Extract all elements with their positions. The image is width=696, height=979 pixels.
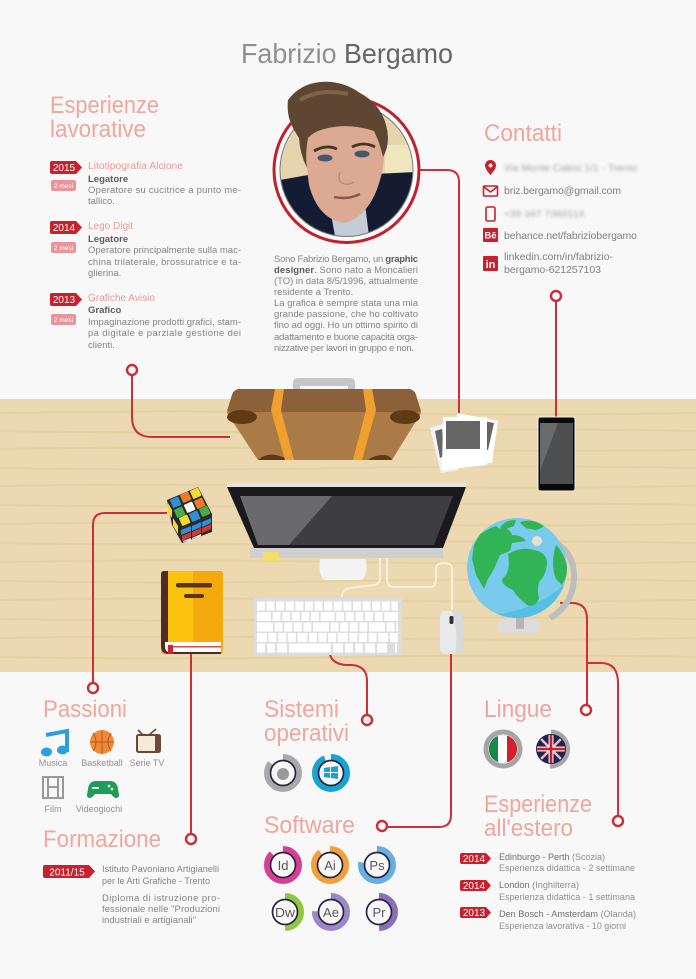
ring: indesign: Id: [278, 858, 288, 873]
icon: behance: Bē: [484, 230, 497, 242]
trip: london: London (Inghilterra): [499, 880, 579, 890]
bio text: La grafica è sempre stata una mia: [274, 298, 419, 309]
icon: windows ring: [315, 757, 347, 789]
ring: illustrator: Ai: [324, 858, 336, 873]
trip: den bosch: [460, 907, 636, 931]
job 2014: 2014: [53, 223, 76, 234]
bio text: [274, 254, 419, 354]
bio text: Sono Fabrizio Bergamo, un graphic: [274, 254, 418, 265]
job 2013: clienti.: [88, 340, 115, 351]
ring: dreamweaver: Dw: [275, 905, 296, 920]
behance text: behance.net/fabriziobergamo: [504, 230, 637, 242]
job 2015: [50, 161, 241, 207]
trip: london: Esperienza didattica - 1 settimana: [499, 892, 635, 902]
job 2013: Impaginazione prodotti grafici, stam-: [88, 317, 241, 328]
panel: contacts: [483, 120, 637, 276]
pin: passions: [88, 683, 98, 693]
bio text: residente a Trento.: [274, 287, 353, 298]
bio text: designer. Sono nato a Moncalieri: [274, 265, 418, 276]
icon: mouse: [440, 611, 463, 654]
label: videogiochi: Videogiochi: [76, 804, 122, 814]
pin: abroad: [613, 816, 623, 826]
phone (blurred): +39 347 7360114: [504, 209, 584, 220]
icon: location pin: [485, 160, 496, 175]
ring: after effects: Ae: [323, 905, 339, 920]
bio text: adattamento e buone capacità orga-: [274, 332, 418, 343]
job 2015: 2015: [53, 163, 76, 174]
flag: uk: [536, 732, 568, 766]
heading: lavorative: lavorative: [50, 116, 146, 143]
pin: education: [186, 834, 196, 844]
panel: languages: [484, 696, 568, 766]
icon: linkedin: [483, 256, 498, 271]
job 2013: 2013: [53, 295, 76, 306]
panel: operating systems: [264, 696, 349, 789]
panel: work experience: [50, 92, 241, 351]
education text: [102, 864, 220, 926]
heading: operativi: operativi: [264, 720, 349, 747]
heading: esperienze: Esperienze: [50, 92, 159, 119]
profile photo: [274, 82, 419, 242]
job 2014: Operatore principalmente sulla mac-: [88, 245, 241, 256]
label: film: Film: [44, 804, 62, 814]
icon: monitor: [227, 483, 466, 610]
ring: premiere: Pr: [372, 905, 386, 920]
bio text: fino ad oggi. Ho un ottimo spirito di: [274, 320, 418, 331]
pin: languages: [581, 705, 591, 715]
trip: den bosch: 2013: [463, 908, 486, 919]
job 2014: [50, 221, 241, 279]
address (blurred): Via Monte Cabisi 1/1 - Trento: [504, 163, 637, 174]
icon: apple ring: [267, 757, 299, 789]
job 2013: Grafiche Avisio: [88, 293, 155, 304]
icon: gamepad: [87, 781, 119, 798]
pin: software: [377, 821, 387, 831]
icon: basketball: [90, 730, 114, 754]
label: serie tv: Serie TV: [130, 758, 164, 768]
pin: os: [362, 715, 372, 725]
icon: behance: [483, 228, 498, 242]
flag: italy: [486, 732, 520, 766]
trip: den bosch: Den Bosch - Amsterdam (Olanda): [499, 909, 636, 919]
desk band: [0, 399, 696, 672]
panel: education: [43, 826, 220, 926]
heading: sistemi: Sistemi: [264, 696, 339, 723]
title: Fabrizio Bergamo: [241, 38, 453, 69]
job 2015: tallico.: [88, 196, 115, 207]
job 2015: Operatore su cucitrice a punto me-: [88, 185, 241, 196]
heading: software: Software: [264, 812, 355, 839]
trip: edinburgh: Esperienza didattica - 2 settimane: [499, 863, 635, 873]
heading: passioni: Passioni: [43, 696, 127, 723]
icon: film: [43, 777, 63, 798]
bio text: grande passione, che ho coltivato: [274, 309, 418, 320]
job 2014: Lego Digit: [88, 221, 133, 232]
badge: 2011/15: [43, 865, 95, 878]
linkedin text line 2: bergamo-621257103: [504, 264, 601, 276]
icon: keyboard: [254, 598, 402, 655]
icon: rubik cube: [167, 487, 212, 543]
heading: esperienze: Esperienze: [484, 791, 592, 818]
trip: edinburgh: [460, 852, 635, 873]
trip: london: [460, 880, 635, 902]
heading: formazione: Formazione: [43, 826, 161, 853]
icon: book: [161, 571, 223, 654]
icon: phone: [486, 207, 495, 221]
pin: contacts: [551, 291, 561, 301]
pin: work: [127, 365, 137, 375]
bio text: (TO) in data 8/5/1996, attualmente: [274, 276, 418, 287]
bio text: nizzative per lavori in gruppo e non.: [274, 343, 414, 354]
job 2013: 2 mesi: [54, 317, 73, 324]
heading: contatti: Contatti: [484, 120, 562, 147]
icon: email: [484, 186, 498, 196]
job 2014: Legatore: [88, 234, 128, 245]
label: musica: Musica: [39, 758, 67, 768]
education text: Diploma di istruzione pro-: [102, 893, 220, 904]
job 2014: 2 mesi: [54, 245, 73, 252]
job 2013: [50, 293, 241, 351]
icon: suitcase: [227, 378, 421, 460]
ring: photoshop: Ps: [369, 858, 385, 873]
icon: music: [41, 731, 68, 756]
job 2013: Grafico: [88, 305, 121, 316]
job 2013: pa digitale e parziale gestione dei: [88, 328, 241, 339]
linkedin text line 1: linkedin.com/in/fabrizio-: [504, 251, 614, 263]
heading: lingue: Lingue: [484, 696, 552, 723]
education text: fessionale nelle "Produzioni: [102, 904, 220, 915]
panel: experience abroad: [460, 791, 636, 931]
education text: per le Arti Grafiche - Trento: [102, 876, 210, 887]
icon: globe: [466, 518, 574, 633]
heading: all'estero: all'estero: [484, 815, 573, 842]
trip: london: 2014: [463, 881, 486, 892]
icon: polaroids: [430, 413, 498, 473]
icon: smartphone: [538, 417, 575, 491]
email text: briz.bergamo@gmail.com: [504, 185, 621, 197]
job 2014: china trilaterale, brossuratrice e ta-: [88, 257, 241, 268]
job 2015: Litotipografia Alcione: [88, 161, 183, 172]
panel: passions: [39, 696, 164, 814]
label: basketball: Basketball: [81, 758, 123, 768]
badge: 2011/15: 2011/15: [49, 868, 85, 878]
job 2015: 2 mesi: [54, 183, 73, 190]
job 2014: glierina.: [88, 268, 121, 279]
education text: Istituto Pavoniano Artigianelli: [102, 864, 219, 875]
job 2015: Legatore: [88, 174, 128, 185]
trip: edinburgh: Edinburgo - Perth (Scozia): [499, 852, 605, 862]
education text: industriali e artigianali": [102, 915, 196, 926]
trip: den bosch: Esperienza lavorativa - 10 giorni: [499, 921, 626, 931]
connector lines: [88, 170, 623, 844]
trip: edinburgh: 2014: [463, 854, 486, 865]
icon: tv: [137, 729, 160, 752]
icon: linkedin: in: [486, 259, 496, 271]
panel: software: [264, 812, 395, 928]
